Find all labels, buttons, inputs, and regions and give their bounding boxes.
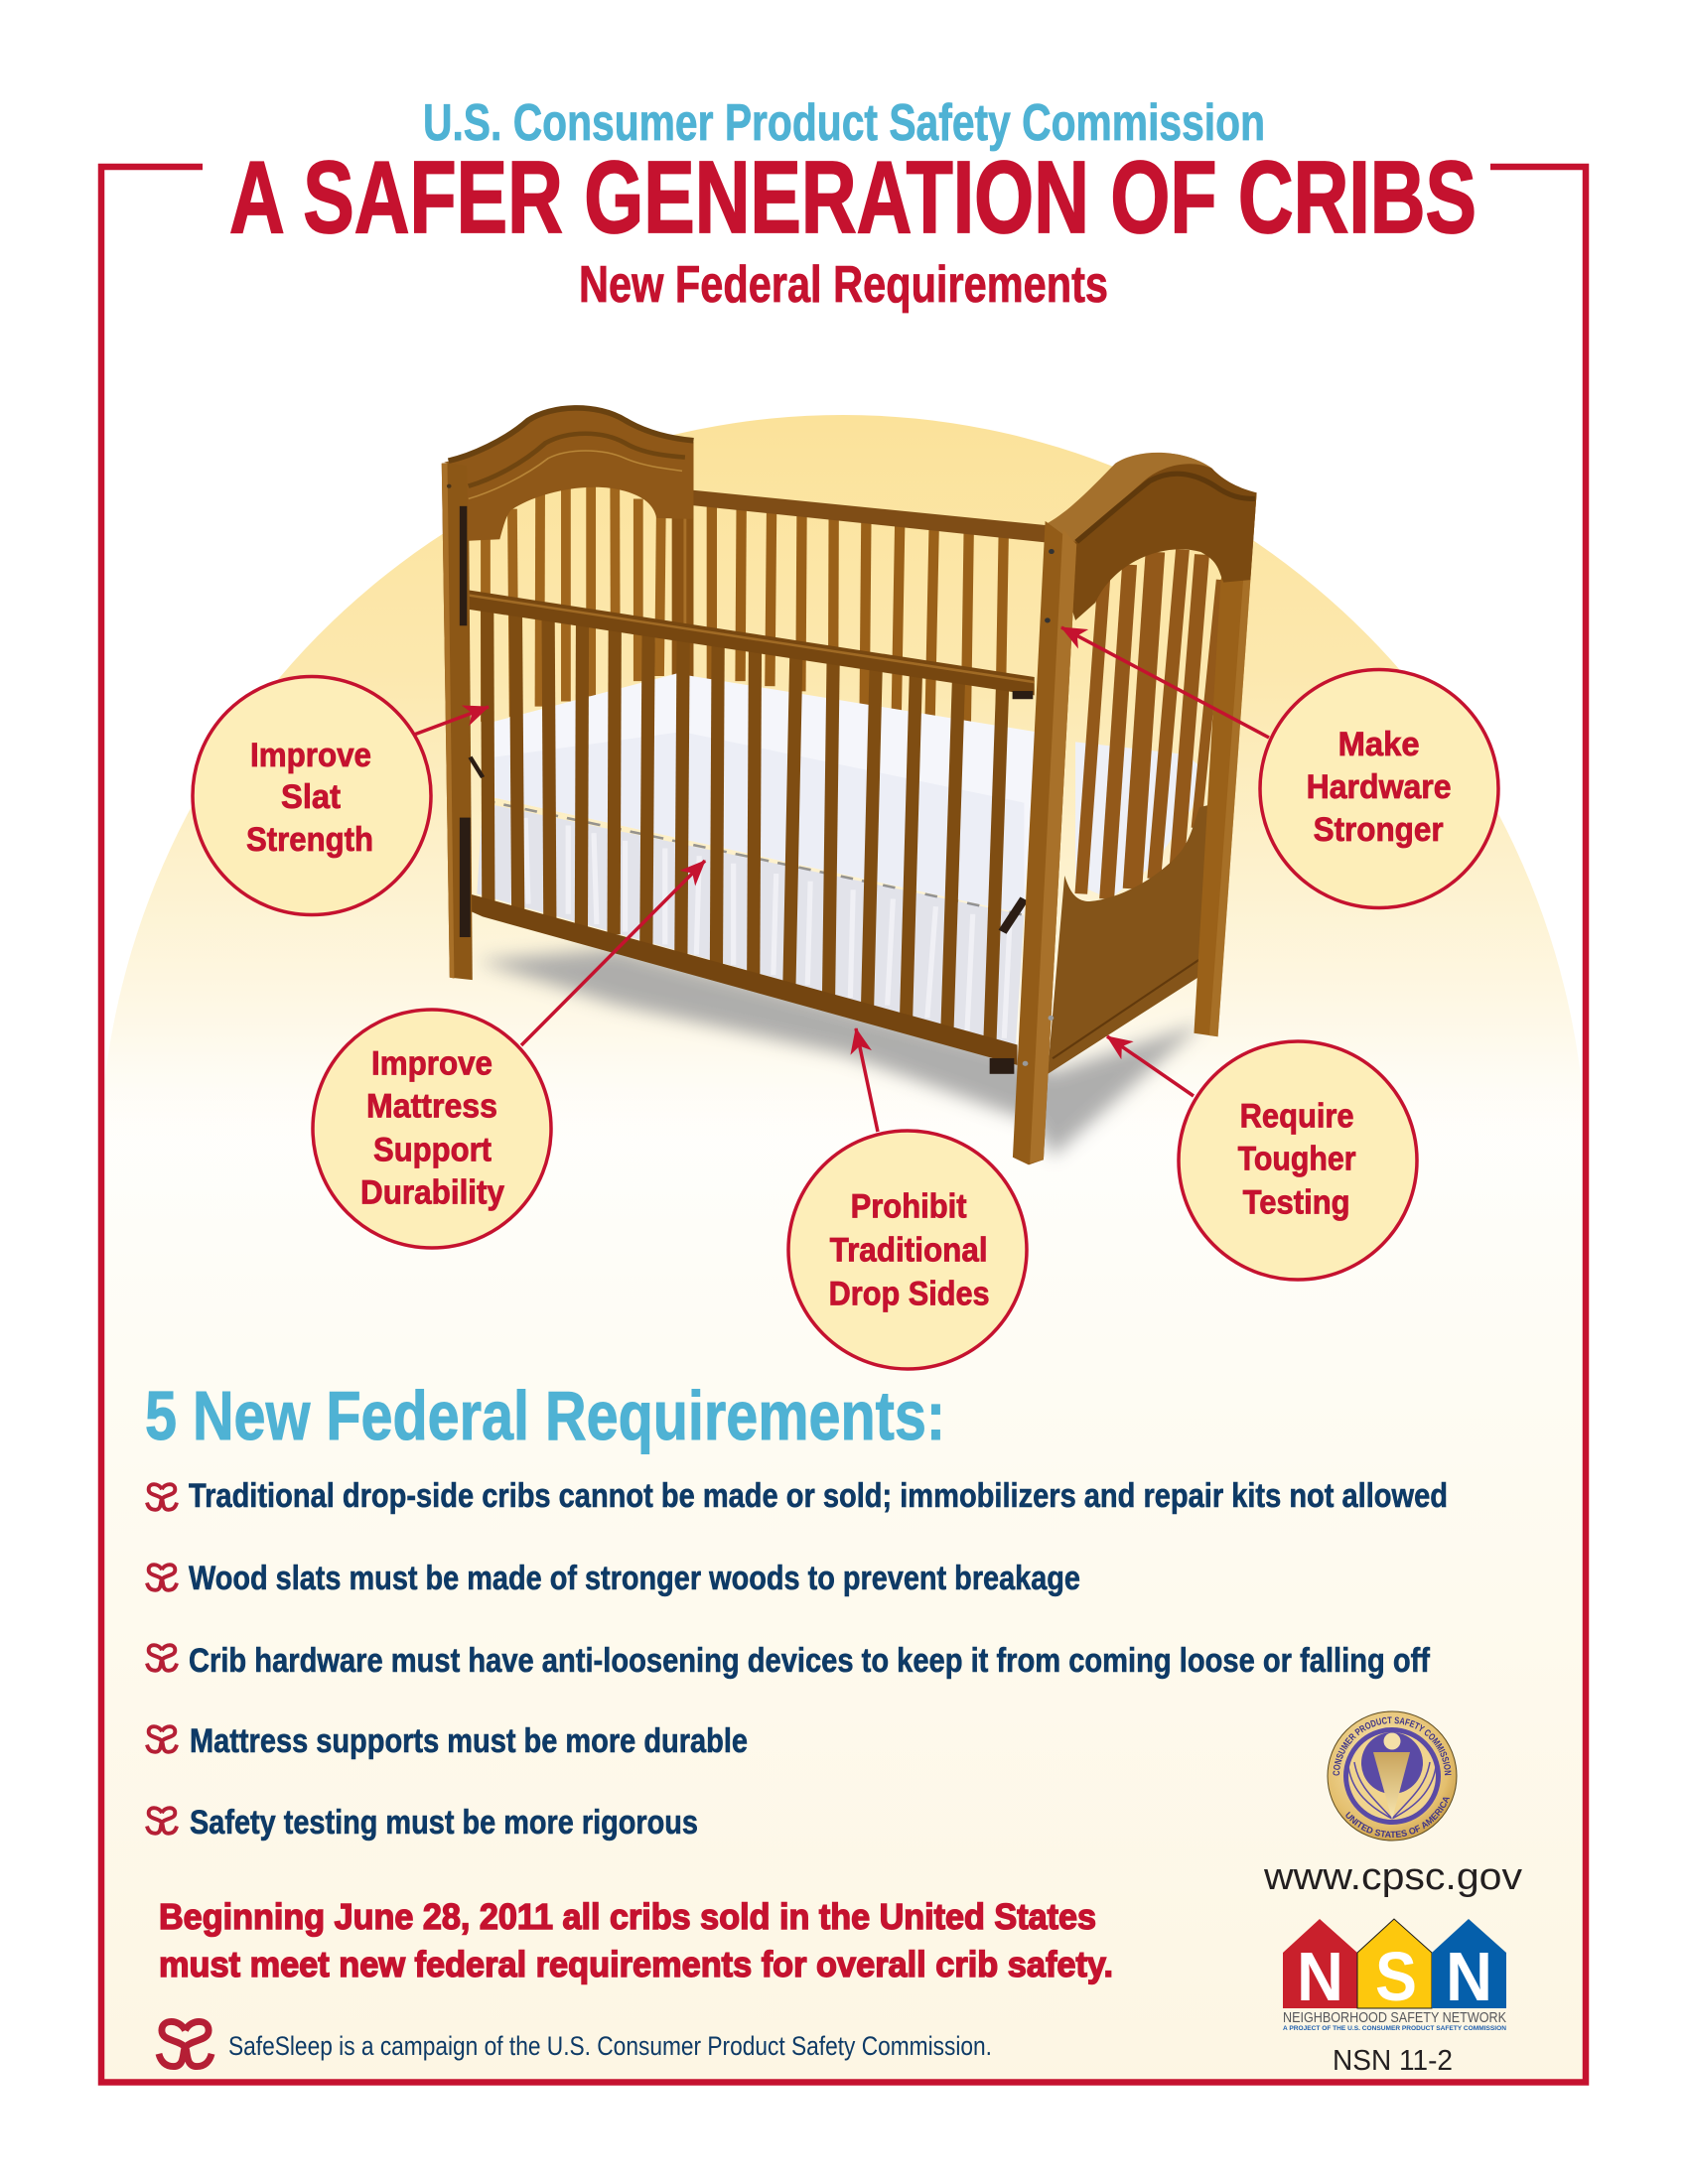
icon: cpsc seal: CONSUMER PRODUCT SAFETY COMMISSION xyxy=(1333,1716,1452,1775)
requirement 2: Wood slats must be made of stronger woods to prevent breakage xyxy=(189,1560,1080,1597)
callout: prohibit traditional drop sides: Drop Sides xyxy=(829,1276,990,1313)
nsn letters: N xyxy=(1297,1938,1343,2015)
nsn logo xyxy=(1283,1919,1506,2032)
house: yellow xyxy=(1357,1919,1432,2008)
deadline statement: must meet new federal requirements for overall crib safety. xyxy=(159,1944,1113,1984)
callout: improve mattress support durability: Mattress xyxy=(366,1088,497,1126)
icon: safesleep logo xyxy=(159,2021,211,2067)
requirement 1: Traditional drop-side cribs cannot be made or sold; immobilizers and repair kits not allowed xyxy=(189,1477,1448,1515)
requirements heading: 5 New Federal Requirements: xyxy=(145,1377,945,1454)
callout: require tougher testing: Require xyxy=(1240,1098,1354,1136)
publication number: NSN 11-2 xyxy=(1333,2045,1453,2077)
callout: improve mattress support durability: Support xyxy=(373,1132,492,1169)
right back post xyxy=(1194,492,1257,1036)
arrows xyxy=(414,627,1269,1132)
crib illustration xyxy=(442,408,1257,1164)
right headboard xyxy=(1046,453,1257,620)
deadline statement xyxy=(159,1896,1113,1984)
deadline statement: Beginning June 28, 2011 all cribs sold in the United States xyxy=(159,1896,1096,1937)
house: blue xyxy=(1432,1919,1506,2008)
left leg and post xyxy=(442,461,473,980)
back rail slats xyxy=(712,498,1004,732)
crib floor shadow xyxy=(477,948,1203,1157)
icon: cpsc seal xyxy=(1327,1711,1458,1841)
right lower panel xyxy=(1048,802,1221,1074)
black hardware xyxy=(460,506,1033,1074)
callout: prohibit traditional drop sides xyxy=(788,1131,1027,1369)
requirements list xyxy=(147,1477,1448,1842)
back rail xyxy=(688,489,1046,542)
requirement 5: Safety testing must be more rigorous xyxy=(190,1804,698,1842)
callout: improve slat strength xyxy=(193,677,431,915)
house: red xyxy=(1283,1919,1357,2008)
callout: require tougher testing: Testing xyxy=(1243,1184,1350,1222)
nsn tagline: A PROJECT OF THE U.S. CONSUMER PRODUCT SAFETY COMMISSION xyxy=(1283,2025,1506,2032)
mattress xyxy=(494,673,1200,914)
panel: cream background xyxy=(101,167,1586,2083)
nsn letters: N xyxy=(1446,1938,1492,2015)
callout: improve slat strength: Slat xyxy=(281,778,341,816)
left headboard slats xyxy=(486,483,661,722)
callout: prohibit traditional drop sides: Prohibit xyxy=(851,1188,967,1226)
near right post xyxy=(1013,521,1076,1164)
callout: require tougher testing xyxy=(1179,1041,1417,1280)
callout: make hardware stronger xyxy=(1260,669,1498,907)
agency name: U.S. Consumer Product Safety Commission xyxy=(423,94,1265,152)
frame xyxy=(101,167,1586,2083)
requirement 3: Crib hardware must have anti-loosening devices to keep it from coming loose or falling off xyxy=(189,1642,1431,1680)
callout: make hardware stronger: Stronger xyxy=(1314,811,1444,849)
callout: improve mattress support durability: Durability xyxy=(360,1174,504,1212)
left inner post xyxy=(672,442,693,681)
nsn letters: S xyxy=(1375,1938,1417,2015)
bed skirt xyxy=(477,800,1024,1045)
callout: prohibit traditional drop sides: Traditional xyxy=(830,1232,988,1270)
subtitle: New Federal Requirements xyxy=(579,256,1108,314)
front bottom rail xyxy=(466,892,1018,1065)
front slats xyxy=(488,606,1003,1040)
front top rail xyxy=(461,589,1035,695)
website url: www.cpsc.gov xyxy=(1263,1856,1522,1898)
callout: improve mattress support durability xyxy=(313,1010,551,1248)
right end slats xyxy=(1081,549,1221,899)
callout: make hardware stronger: Hardware xyxy=(1307,768,1452,806)
nsn name: NEIGHBORHOOD SAFETY NETWORK xyxy=(1283,2009,1506,2026)
callout: improve slat strength: Improve xyxy=(250,737,371,774)
sunburst semicircle xyxy=(99,415,1587,1171)
safesleep note: SafeSleep is a campaign of the U.S. Consumer Product Safety Commission. xyxy=(228,2031,992,2061)
icon: cpsc seal: UNITED STATES OF AMERICA xyxy=(1345,1797,1450,1839)
callout: improve mattress support durability: Improve xyxy=(371,1045,492,1083)
left headboard xyxy=(444,408,693,541)
callout: require tougher testing: Tougher xyxy=(1238,1141,1356,1178)
callout: improve slat strength: Strength xyxy=(246,821,373,859)
callout: make hardware stronger: Make xyxy=(1338,726,1420,763)
nsn letters xyxy=(1297,1938,1492,2015)
requirement 4: Mattress supports must be more durable xyxy=(190,1722,748,1760)
